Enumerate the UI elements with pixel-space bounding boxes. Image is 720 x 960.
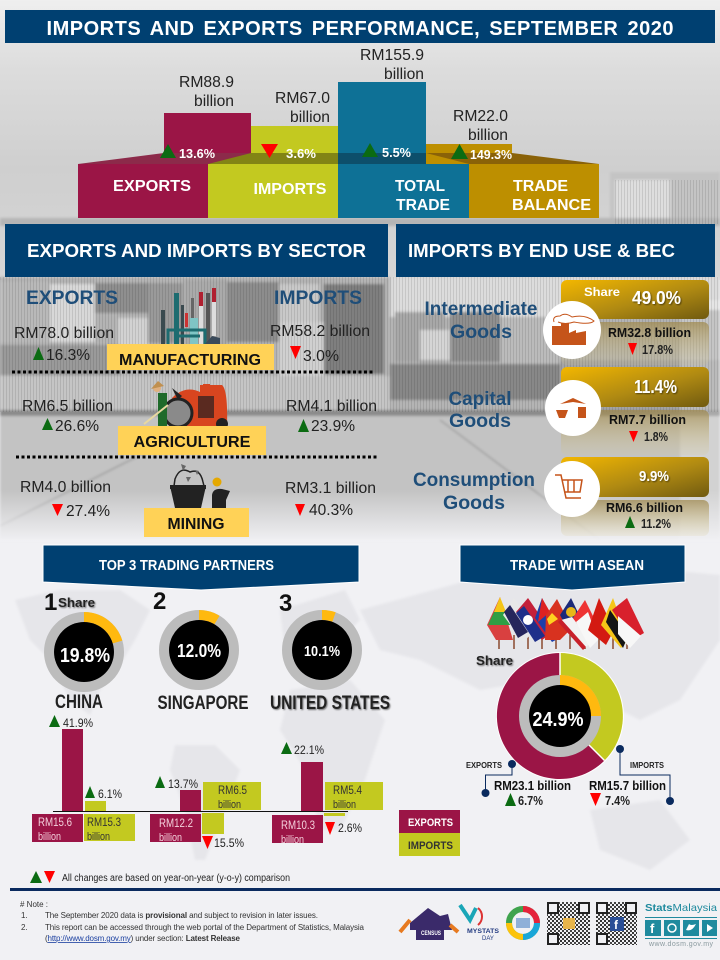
world map background [15, 560, 720, 870]
bar: imports: RM67.0 [275, 90, 330, 107]
imports manufacturing value [270, 323, 370, 365]
imports mining value: RM3.1 billion [285, 480, 376, 497]
footer notes: The September 2020 data is provisional and subject to revision in later issues. [45, 911, 318, 920]
callout: ASEAN exports: RM23.1 billion [494, 778, 571, 793]
legend: exports and imports: EXPORTS [408, 817, 453, 829]
note: year-on-year comparison [30, 871, 290, 884]
United States bars: billion [333, 799, 356, 811]
partner 2: Singapore share [153, 588, 248, 714]
title bar [5, 10, 715, 43]
footer notes [20, 900, 365, 943]
callout: ASEAN imports: IMPORTS [630, 761, 665, 770]
imports agriculture value: RM4.1 billion [286, 398, 377, 415]
imports mining value [285, 480, 376, 519]
icon: ASEAN flags [487, 597, 644, 650]
exports agriculture value: RM6.5 billion [22, 398, 113, 415]
imports mining value: 40.3% [309, 502, 353, 519]
title bar: IMPORTS AND EXPORTS PERFORMANCE, SEPTEMBER 2020 [46, 18, 674, 40]
bar: exports: billion [194, 93, 234, 110]
callout: ASEAN exports [466, 760, 571, 808]
logo: StatsMalaysia: StatsMalaysia [645, 902, 717, 914]
QR code: Malaysia [547, 902, 590, 945]
bar: trade balance: TRADE [513, 178, 568, 195]
imports manufacturing value: RM58.2 billion [270, 323, 370, 340]
callout: ASEAN exports: 6.7% [518, 793, 543, 808]
donut chart: ASEAN share [496, 652, 624, 780]
bar: exports: 13.6% [179, 146, 215, 161]
label: mining: MINING [168, 516, 224, 533]
partner 1: China share: 19.8% [60, 645, 110, 667]
logo: StatsMalaysia [645, 902, 717, 948]
callout: ASEAN imports [589, 745, 674, 808]
footer notes: # Note : [20, 900, 48, 909]
bar: trade balance: BALANCE [512, 197, 591, 214]
imports agriculture value: 23.9% [311, 418, 355, 435]
China bars: RM15.3 [87, 815, 121, 829]
bar: exports [78, 74, 251, 218]
capital goods: 1.8% [644, 430, 668, 444]
label: agriculture: AGRICULTURE [134, 434, 251, 451]
United States bars: RM10.3 [281, 818, 315, 832]
bar: trade balance [426, 108, 599, 218]
capital goods: Goods [449, 411, 511, 432]
exports manufacturing value: RM78.0 billion [14, 325, 114, 342]
China bars: 41.9% [63, 716, 93, 730]
legend: exports and imports: IMPORTS [408, 840, 453, 852]
footer notes: This report can be accessed through the web portal of the Department of Statistics, Malaysia [45, 923, 365, 932]
partner 2: Singapore share: 12.0% [177, 641, 221, 661]
label: agriculture [118, 426, 266, 455]
imports manufacturing value: 3.0% [303, 348, 339, 365]
icon: farmer and tractor [144, 381, 228, 430]
logo: census: CENSUS [421, 931, 441, 937]
exports mining value: 27.4% [66, 503, 110, 520]
panel: trade with ASEAN [466, 597, 674, 808]
heading: exports and imports by sector [5, 224, 388, 277]
heading: imports by end use and BEC [396, 224, 715, 277]
donut chart: ASEAN share: 24.9% [532, 709, 584, 731]
logo: MyStats Day: DAY [482, 936, 494, 942]
callout: ASEAN imports: 7.4% [605, 793, 630, 808]
bar: total trade: TRADE [396, 197, 450, 214]
Singapore bars: 15.5% [214, 836, 244, 850]
intermediate goods: Goods [450, 322, 512, 343]
icon: plane, ship, truck [556, 398, 586, 418]
intermediate goods: Share [584, 285, 620, 299]
bar: total trade [338, 47, 469, 218]
legend: exports and imports [399, 810, 460, 856]
partner 1: China share: CHINA [55, 692, 103, 713]
exports agriculture value: 26.6% [55, 418, 99, 435]
United States bars: billion [281, 834, 304, 846]
intermediate goods: Intermediate [424, 299, 538, 320]
panel: top trading partners [32, 588, 460, 856]
partner 1: China share [44, 589, 119, 713]
capital goods [448, 367, 709, 455]
icon: factory [552, 323, 586, 345]
imports agriculture value [286, 398, 377, 435]
bar: total trade: TOTAL [395, 178, 445, 195]
Singapore bars: RM12.2 [159, 816, 193, 830]
consumption goods: 9.9% [639, 468, 669, 485]
bar: imports: 3.6% [286, 146, 316, 161]
China bars [32, 715, 135, 843]
logo: StatsMalaysia: f [650, 921, 655, 936]
label: mining [144, 508, 249, 537]
icon: mining cart and miner [170, 464, 230, 508]
Singapore bars: RM6.5 [218, 783, 247, 797]
logo: MyStats Day: MYSTATS [467, 928, 500, 935]
partner 3: United States share: 3 [279, 590, 292, 617]
column heading: exports: EXPORTS [26, 287, 118, 309]
United States bars [272, 742, 383, 846]
share label: Share [476, 653, 513, 668]
banner: trade with ASEAN: TRADE WITH ASEAN [510, 558, 644, 574]
Singapore bars [150, 776, 261, 850]
panel: imports by end use [413, 280, 709, 536]
panel: headline trade bars [78, 47, 599, 218]
partner 3: United States share: UNITED STATES [270, 693, 390, 714]
icon: refinery [161, 288, 220, 344]
QR code: Facebook [596, 902, 637, 945]
China bars: 6.1% [98, 787, 122, 801]
exports mining value: RM4.0 billion [20, 479, 111, 496]
banner: trade with ASEAN [460, 545, 685, 590]
consumption goods: Goods [443, 493, 505, 514]
capital goods: RM7.7 billion [609, 412, 686, 427]
footer notes: 1. [21, 911, 28, 920]
footer notes: 2. [21, 923, 28, 932]
column heading: imports: IMPORTS [274, 287, 362, 309]
consumption goods: Consumption [413, 470, 535, 491]
logo: MyStats Day [460, 905, 500, 942]
consumption goods [413, 457, 709, 536]
label: manufacturing: MANUFACTURING [119, 352, 261, 369]
partner 2: Singapore share: SINGAPORE [158, 693, 248, 714]
intermediate goods: RM32.8 billion [608, 325, 691, 340]
bar: imports: IMPORTS [254, 181, 326, 198]
exports agriculture value [22, 398, 113, 435]
intermediate goods: 17.8% [642, 343, 673, 357]
bar: exports: EXPORTS [113, 178, 191, 195]
capital goods: 11.4% [634, 377, 677, 397]
bar: imports: billion [290, 109, 330, 126]
footer logos [400, 902, 717, 948]
intermediate goods [424, 280, 709, 365]
United States bars: RM5.4 [333, 783, 362, 797]
bar chart: partner exports and imports [32, 715, 383, 850]
exports manufacturing value [14, 325, 114, 364]
icon: shopping cart [555, 475, 582, 498]
bar: imports [208, 90, 338, 218]
Singapore bars: billion [159, 832, 182, 844]
logo: StatsMalaysia: www.dosm.gov.my [648, 941, 714, 948]
consumption goods: 11.2% [641, 517, 671, 531]
intermediate goods: 49.0% [632, 288, 681, 308]
banner: top 3 trading partners: TOP 3 TRADING PARTNERS [99, 558, 274, 574]
consumption goods: RM6.6 billion [606, 500, 683, 515]
callout: ASEAN imports: RM15.7 billion [589, 778, 666, 793]
heading: imports by end use and BEC: IMPORTS BY END USE & BEC [408, 240, 675, 261]
bar: total trade: billion [384, 66, 424, 83]
China bars: billion [38, 831, 61, 843]
Singapore bars: 13.7% [168, 777, 198, 791]
bar: trade balance: billion [468, 127, 508, 144]
bar: total trade: RM155.9 [360, 47, 424, 64]
partner 2: Singapore share: 2 [153, 588, 166, 615]
partner 3: United States share: 10.1% [304, 643, 340, 660]
partner 3: United States share [270, 590, 390, 714]
bar: total trade: 5.5% [382, 145, 411, 160]
note: year-on-year comparison: All changes are based on year-on-year (y-o-y) comparison [62, 873, 290, 884]
bar: exports: RM88.9 [179, 74, 234, 91]
label: manufacturing [107, 344, 274, 370]
logo: SDG wheel [509, 909, 537, 937]
capital goods: Capital [448, 389, 512, 410]
United States bars: 22.1% [294, 743, 324, 757]
logo: census [400, 908, 458, 940]
exports mining value [20, 479, 111, 520]
banner: top 3 trading partners [43, 545, 359, 590]
United States bars: 2.6% [338, 821, 362, 835]
footer notes: (http://www.dosm.gov.my) under section: Latest Release [45, 934, 241, 943]
exports manufacturing value: 16.3% [46, 347, 90, 364]
bar: trade balance: RM22.0 [453, 108, 508, 125]
China bars: RM15.6 [38, 815, 72, 829]
partner 1: China share: Share [58, 595, 95, 610]
bar: trade balance: 149.3% [470, 147, 512, 162]
Singapore bars: billion [218, 799, 241, 811]
callout: ASEAN exports: EXPORTS [466, 761, 503, 770]
China bars: billion [87, 831, 110, 843]
panel: sector breakdown [12, 287, 377, 537]
heading: exports and imports by sector: EXPORTS AND IMPORTS BY SECTOR [27, 240, 366, 261]
partner 1: China share: 1 [44, 589, 57, 616]
QR code: Facebook: f [614, 918, 619, 932]
